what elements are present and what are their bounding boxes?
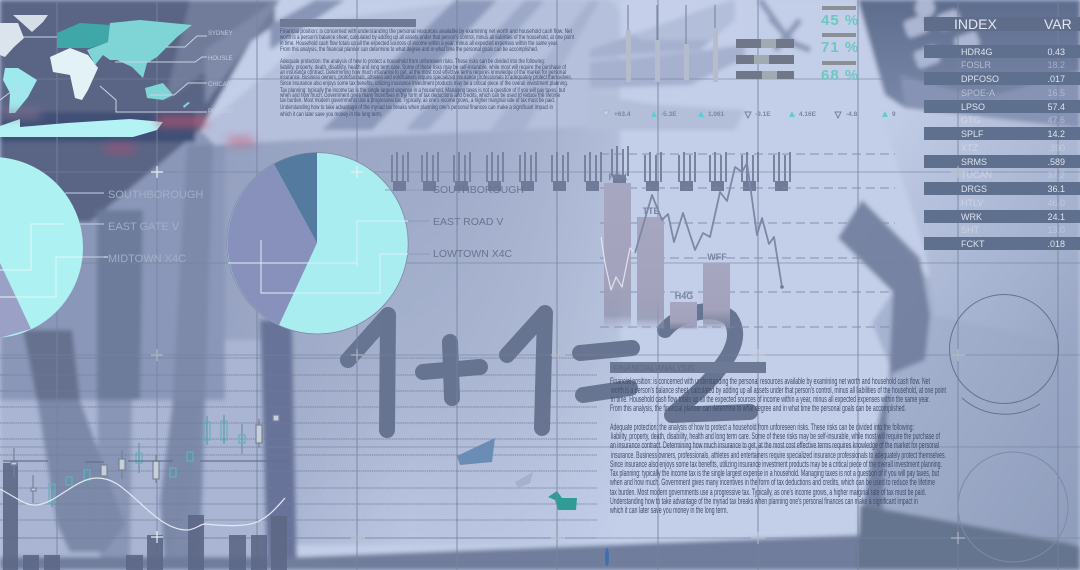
top text heading bar [280, 19, 416, 27]
table labels: FCKT [961, 239, 985, 249]
percentage readouts: 68 % [821, 67, 859, 84]
table labels: WRK [961, 212, 982, 222]
table labels: 46.0 [1047, 198, 1065, 208]
text block: top: Adequate protection: the analysis of how to protect a household from unforeseen risks. These risks can be divided into the following: [280, 59, 545, 65]
map callouts [0, 36, 207, 112]
left pie labels: EAST GATE V [108, 221, 180, 233]
text block: top: Understanding how to take advantage of the myriad tax breaks when planning one's personal finances can make a significant impact in [280, 105, 553, 111]
text block: top: when and how much. Government gives many incentives in the form of tax deductions and credits, which can be used to reduce the lifetime [279, 93, 560, 99]
table labels: 0.43 [1047, 47, 1065, 57]
pie chart: centre [227, 153, 430, 334]
table labels: SRMS [961, 157, 987, 167]
ticker row: 4.16E [799, 111, 817, 118]
text block: top: an insurance contract. Determining how much insurance to get, at the most cost effective terms requires knowledge of the market for personal [280, 70, 566, 76]
bar labels [608, 172, 727, 301]
centre pie labels: EAST ROAD V [433, 216, 503, 228]
text block: top: insurance. Business owners, professionals, athletes and entertainers require specialized insurance professionals to adequately protect themselves. [280, 75, 572, 81]
map labels [208, 31, 236, 115]
table labels: 18.2 [1047, 60, 1065, 70]
ticker row: -5.3E [661, 111, 677, 118]
text block: top: liability, property, death, disability, health and long term care. Some of these risks may be self-insurable, while most will require the purchase of [280, 65, 566, 71]
red and blue glitch streaks [0, 112, 253, 151]
text block: lower [609, 362, 946, 515]
index table [924, 16, 1080, 250]
ticker row [603, 111, 896, 118]
table labels [961, 47, 1065, 249]
lower-left bar chart [3, 463, 287, 570]
table labels: 37.2 [1047, 170, 1065, 180]
table labels: SPOE-A [961, 88, 995, 98]
table labels: DPFOSO [961, 74, 999, 84]
ticker row: 9 [892, 111, 896, 118]
table labels: 47.6 [1047, 115, 1065, 125]
table labels: 14.2 [1047, 129, 1065, 139]
table header: INDEX [954, 16, 997, 32]
table labels: .390 [1047, 143, 1065, 153]
table labels: 57.4 [1047, 102, 1065, 112]
paper ruled lines [0, 358, 597, 538]
lower-left trend curve [0, 478, 285, 530]
table labels: DRGS [961, 184, 987, 194]
stacked progress bars [736, 39, 794, 79]
map labels: PARLIBS [208, 109, 233, 115]
text block: top: Since insurance also enjoys some tax benefits, utilizing insurance investment products may be a critical piece of the overall investment planning. [280, 81, 568, 87]
centre pie labels [433, 184, 524, 260]
text block: top: which it can later save you money in the long term. [279, 112, 382, 118]
ticker row: 1.061 [708, 111, 725, 118]
bar labels: TTE [642, 206, 660, 216]
text block: top: Tax planning: typically the income tax is the single largest expense in a household. Managing taxes is not a question of if you will pay taxes, but [280, 88, 565, 94]
table labels: SHT [961, 225, 980, 235]
lower text heading bar [610, 362, 766, 373]
bar labels: PRK [608, 172, 628, 182]
map labels: HOUSLE [208, 56, 233, 62]
world map panel [0, 15, 253, 151]
map labels: CHICAGO [208, 82, 236, 88]
dashed chart guides [600, 154, 895, 327]
table header [924, 16, 1080, 32]
text block: top: worth is a person's balance sheet, calculated by adding up all assets under that person's control, minus all liabilities of the household, at one point [279, 35, 574, 41]
table labels: HTLV [961, 198, 983, 208]
text block: top: From this analysis, the financial planner can determine to what degree and in what time the personal goals can be accomplished. [280, 47, 538, 53]
table labels: LPSO [961, 102, 985, 112]
ticker row: +63.4 [614, 111, 631, 118]
table row stripes [924, 45, 1080, 250]
map labels: SYDNEY [208, 31, 233, 37]
bar labels: H4G [675, 291, 693, 301]
ticker row: -9.1E [755, 111, 771, 118]
centre pie labels: LOWTOWN X4C [433, 248, 513, 260]
table labels: .018 [1047, 239, 1065, 249]
left pie labels: SOUTHBOROUGH [108, 189, 203, 201]
text block: lower: which it can later save you money in the long term. [609, 504, 728, 515]
torn paper fragments [457, 438, 609, 566]
table labels: 24.1 [1047, 212, 1065, 222]
lower-left candlestick chart [3, 415, 290, 507]
table labels: FOSLR [961, 60, 992, 70]
table labels: SPLF [961, 129, 984, 139]
ticker row: -4.8 [846, 111, 858, 118]
table header: VAR [1044, 16, 1072, 32]
table labels: 16.5 [1047, 88, 1065, 98]
table labels: .017 [1047, 74, 1065, 84]
table labels: TUCAN [961, 170, 992, 180]
text block: top: tax burden. Most modern governments use a progressive tax. Typically, as one's income grows, a higher marginal rate of tax must be paid. [280, 98, 555, 104]
left pie labels [108, 189, 203, 265]
bar labels: WFF [707, 252, 727, 262]
table labels: .589 [1047, 157, 1065, 167]
percentage readouts: 45 % [821, 12, 859, 29]
percentage readouts: 71 % [821, 39, 859, 56]
table labels: GTG [961, 115, 980, 125]
bar chart [604, 172, 730, 330]
text block: top: in time. Household cash flow totals up all the expected sources of income within a year, minus all expected expenses within the same year. [280, 41, 558, 47]
table labels: HDR4G [961, 47, 993, 57]
line chart [601, 163, 784, 290]
left pie labels: MIDTOWN X4C [108, 253, 186, 265]
table labels: 13.0 [1047, 225, 1065, 235]
binder coils [392, 146, 790, 191]
text block: top [279, 19, 574, 118]
centre pie labels: SOUTHBOROUGH [433, 184, 524, 196]
table labels: 36.1 [1047, 184, 1065, 194]
percentage readouts [821, 6, 859, 84]
pie chart: left [0, 157, 108, 340]
calculation: 1+1=2 [348, 311, 750, 430]
crosshair markers [151, 166, 965, 544]
text block: top: Financial position: is concerned with understanding the personal resources available by examining net worth and household cash flow. Net [280, 29, 572, 35]
lower text heading bar: FINANCIAL ANALYSIS [613, 364, 695, 373]
table labels: XTZ [961, 143, 979, 153]
map continents [0, 15, 192, 137]
top candlestick chart [626, 5, 718, 82]
gauge circles [950, 294, 1068, 562]
